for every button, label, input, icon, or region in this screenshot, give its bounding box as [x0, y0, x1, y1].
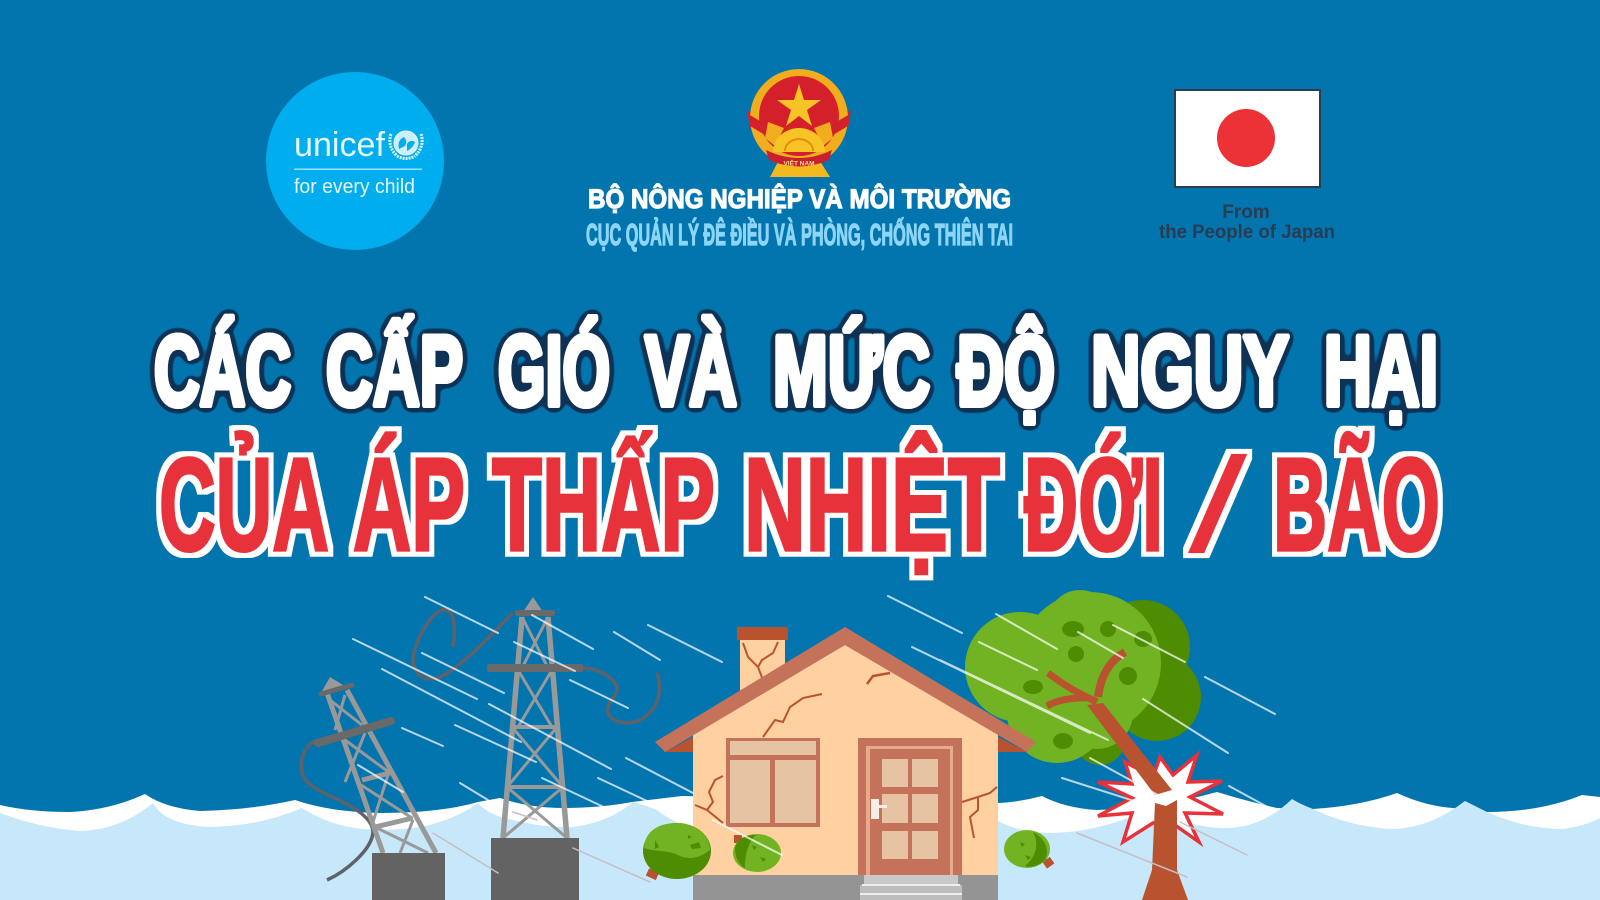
- logo: Japan flag: the People of Japan: [1159, 222, 1335, 243]
- title line 2: THẤP: [492, 431, 715, 578]
- tower base: [372, 853, 445, 900]
- title line 1: CÁC: [154, 315, 291, 426]
- emblem side ribbons: [747, 110, 851, 143]
- organisation heading: CỤC QUẢN LÝ ĐÊ ĐIỀU VÀ PHÒNG, CHỐNG THIÊN TAI: [586, 216, 1013, 252]
- broken tree: [965, 590, 1223, 900]
- flood water: [0, 792, 1600, 900]
- icon: gold star: [777, 84, 821, 126]
- foundation: [693, 875, 998, 900]
- icon: unicef emblem: [390, 131, 422, 158]
- house: [655, 627, 1036, 900]
- title line 1: VÀ: [645, 315, 737, 426]
- logo: unicef: for every child: [294, 175, 415, 198]
- title line 2: ÁP: [353, 431, 465, 578]
- title line 1: NGUY: [1091, 315, 1289, 426]
- organisation heading: [586, 183, 1013, 252]
- title line 2: /: [1181, 432, 1253, 579]
- title line 1: HẠI: [1324, 315, 1438, 426]
- upright power tower: [413, 597, 659, 900]
- title line 1: MỨC: [773, 315, 930, 426]
- title line 2: ĐỚI: [1024, 431, 1163, 578]
- title line 2: NHIỆT: [744, 431, 1000, 578]
- door: [858, 738, 962, 875]
- title line 1: CẤP: [326, 315, 463, 426]
- tilted power tower: [301, 677, 445, 900]
- logo: Japan flag: From: [1222, 202, 1270, 223]
- window: [726, 738, 820, 827]
- tower base: [491, 838, 579, 900]
- bush middle: [733, 834, 781, 872]
- wall: [693, 645, 998, 875]
- title line 1: ĐỘ: [957, 315, 1055, 426]
- logo: Vietnam national emblem: VIỆT NAM: [783, 158, 815, 168]
- logo: unicef: [266, 72, 444, 250]
- tree trunk: [1047, 652, 1188, 900]
- icon: starburst break: [1098, 755, 1223, 842]
- roof: [655, 627, 1036, 752]
- organisation heading: BỘ NÔNG NGHIỆP VÀ MÔI TRƯỜNG: [588, 183, 1011, 214]
- logo: unicef: unicef: [294, 126, 386, 164]
- steps: [860, 875, 962, 900]
- wind and rain streaks: [353, 596, 1275, 882]
- title line 2: CỦA: [159, 431, 329, 578]
- title line 2: [159, 431, 1440, 579]
- logo: Vietnam national emblem: [747, 69, 851, 177]
- title line 1: [154, 315, 1438, 426]
- title line 2: BÃO: [1273, 431, 1440, 578]
- bushes: [643, 823, 1054, 880]
- door handle: [871, 799, 887, 819]
- title line 1: GIÓ: [498, 315, 610, 426]
- wall cracks: [695, 673, 997, 838]
- bush right: [1004, 830, 1054, 869]
- chimney: [737, 627, 788, 695]
- bush left: [643, 823, 711, 880]
- logo: Japan flag: [1159, 90, 1335, 243]
